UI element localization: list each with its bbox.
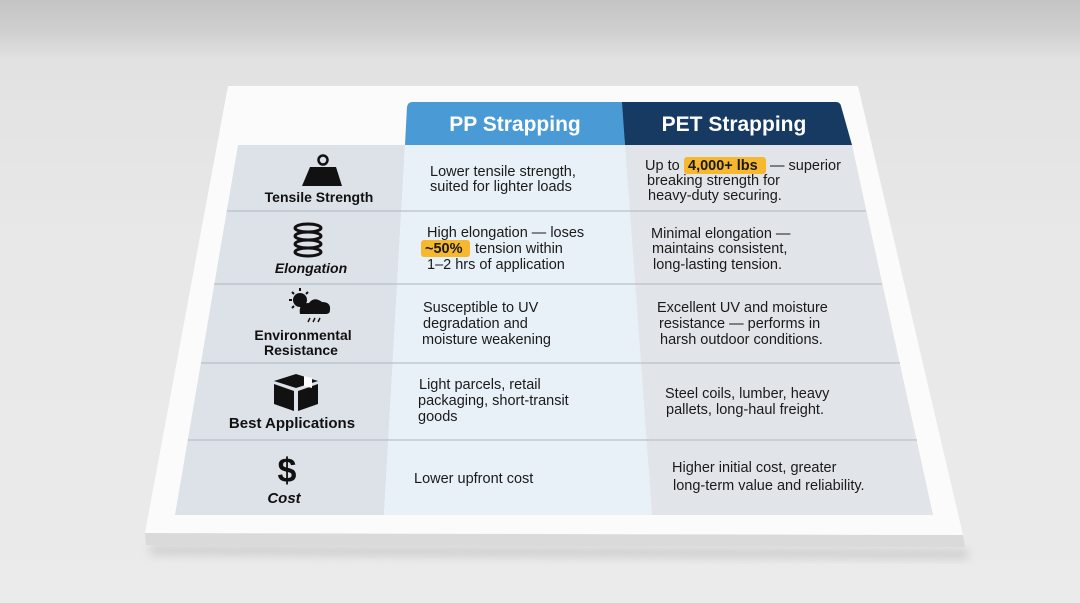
header: PET Strapping: PET Strapping <box>662 113 806 136</box>
PET cells: resistance — performs in <box>659 316 820 332</box>
PET cells: maintains consistent, <box>652 241 787 257</box>
PP tensile: Lower tensile strength, <box>430 164 576 180</box>
icon: box <box>274 374 318 411</box>
row label: Elongation: Elongation <box>275 260 347 276</box>
row label: Environmental Resistance: Environmental <box>254 327 352 343</box>
PP elongation: tension within <box>475 241 563 257</box>
row label: Cost: Cost <box>267 490 302 507</box>
header: PET Strapping <box>622 102 852 145</box>
PP cells <box>414 164 584 487</box>
PP cells: goods <box>418 409 458 425</box>
PP elongation <box>421 225 584 273</box>
PET tensile: 4,000+ lbs <box>688 158 758 174</box>
PP applications: Light parcels, retail <box>419 377 541 393</box>
PP environmental: Susceptible to UV <box>423 300 539 316</box>
row label: Tensile Strength: Tensile Strength <box>265 189 373 205</box>
PP cost: Lower upfront cost <box>414 471 533 487</box>
row label: Best Applications <box>229 374 355 432</box>
icon: sun and cloud <box>289 288 330 322</box>
PP cells: degradation and <box>423 316 528 332</box>
PET tensile: — superior <box>770 158 841 174</box>
PET cells <box>645 157 865 494</box>
board <box>145 86 968 558</box>
PP elongation: ~50% <box>425 241 463 257</box>
row label: Environmental Resistance: Resistance <box>264 342 338 358</box>
PP cells: packaging, short-transit <box>418 393 569 409</box>
PET cells: harsh outdoor conditions. <box>660 332 823 348</box>
icon: spring <box>295 224 321 256</box>
PET cells: long-term value and reliability. <box>673 478 865 494</box>
PET applications: Steel coils, lumber, heavy <box>665 386 830 402</box>
PET environmental: Excellent UV and moisture <box>657 300 828 316</box>
PET tensile: breaking strength for <box>647 173 780 189</box>
table columns <box>175 145 933 515</box>
header: PP Strapping: PP Strapping <box>449 113 581 136</box>
row label: Tensile Strength <box>265 156 373 205</box>
PP cells: moisture weakening <box>422 332 551 348</box>
PET tensile: heavy-duty securing. <box>648 188 782 204</box>
PP elongation: 1–2 hrs of application <box>427 257 565 273</box>
PP cells: suited for lighter loads <box>430 179 572 195</box>
PET elongation: Minimal elongation — <box>651 226 791 242</box>
PET cells: pallets, long-haul freight. <box>666 402 824 418</box>
PET tensile: Up to <box>645 158 680 174</box>
PET tensile <box>645 157 841 204</box>
row label: Best Applications: Best Applications <box>229 415 355 432</box>
PP elongation: High elongation — loses <box>427 225 584 241</box>
row label: Environmental Resistance <box>254 288 352 358</box>
header: PP Strapping <box>405 102 625 145</box>
PET cost: Higher initial cost, greater <box>672 460 837 476</box>
icon: dollar: $ <box>278 452 297 490</box>
row label: Cost <box>267 452 302 507</box>
row label: Elongation <box>275 224 347 276</box>
PET cells: long-lasting tension. <box>653 257 782 273</box>
icon: weight <box>302 156 342 186</box>
